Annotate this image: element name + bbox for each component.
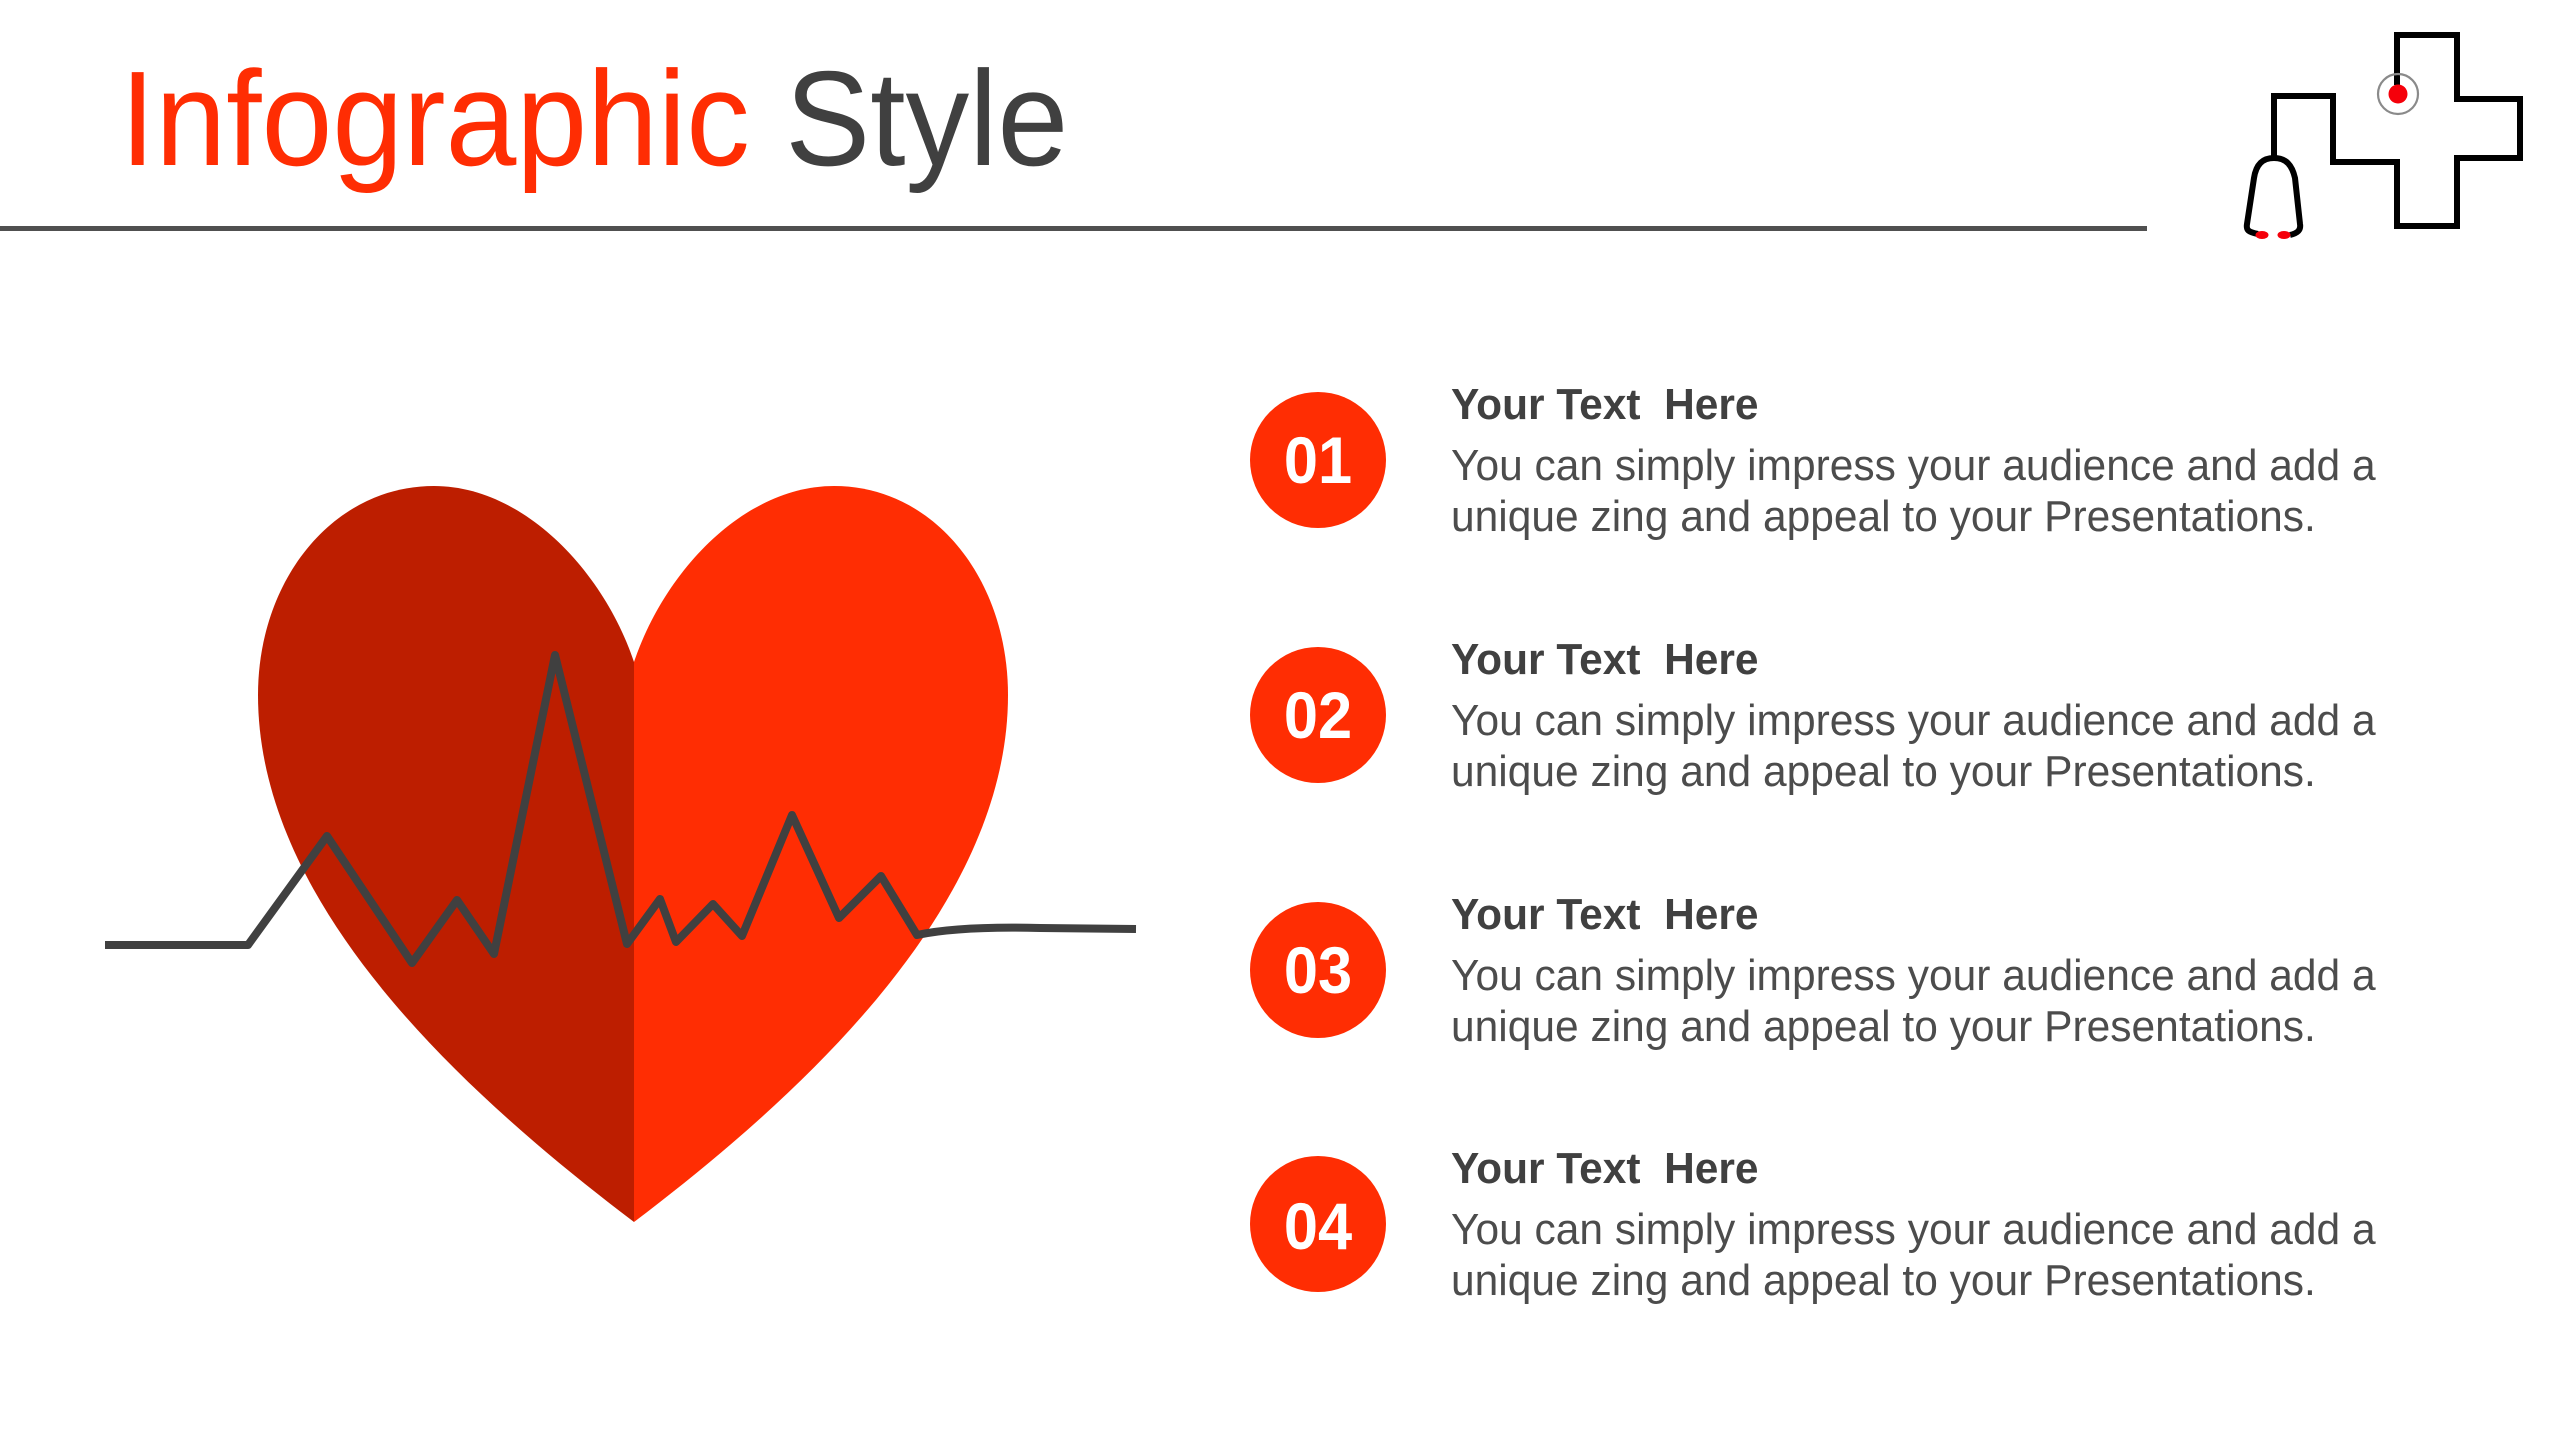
body text 01: You can simply impress your audience and add a unique zing and appeal to your Presentations. bbox=[1451, 441, 2376, 541]
heart with heartbeat line bbox=[105, 486, 1136, 1222]
heading 02: Your Text Here bbox=[1451, 635, 1759, 684]
badge 02: 02 bbox=[1284, 678, 1352, 752]
header rule bbox=[0, 226, 2147, 231]
badge 01 bbox=[1250, 392, 1386, 528]
badge 03 bbox=[1250, 902, 1386, 1038]
body text 02: You can simply impress your audience and add a unique zing and appeal to your Presentations. bbox=[1451, 696, 2376, 796]
heartbeat line bbox=[105, 655, 1136, 963]
badge 02 bbox=[1250, 647, 1386, 783]
heading 04: Your Text Here bbox=[1451, 1144, 1759, 1193]
item 03 bbox=[1250, 890, 2376, 1051]
badge 04 bbox=[1250, 1156, 1386, 1292]
item 04 bbox=[1250, 1144, 2376, 1305]
badge 04: 04 bbox=[1284, 1189, 1352, 1263]
heading 03: Your Text Here bbox=[1451, 890, 1759, 939]
badge 01: 01 bbox=[1284, 423, 1352, 497]
item 02 bbox=[1250, 635, 2376, 796]
body text 04: You can simply impress your audience and add a unique zing and appeal to your Presentations. bbox=[1451, 1205, 2376, 1305]
heading 01: Your Text Here bbox=[1451, 380, 1759, 429]
item 01 bbox=[1250, 380, 2376, 541]
title: Infographic Style bbox=[120, 43, 1068, 194]
heart: left half bbox=[258, 486, 634, 1222]
icon: stethoscope medical cross bbox=[2244, 32, 2523, 239]
heart: right half bbox=[634, 486, 1008, 1222]
badge 03: 03 bbox=[1284, 933, 1352, 1007]
body text 03: You can simply impress your audience and add a unique zing and appeal to your Presentations. bbox=[1451, 951, 2376, 1051]
